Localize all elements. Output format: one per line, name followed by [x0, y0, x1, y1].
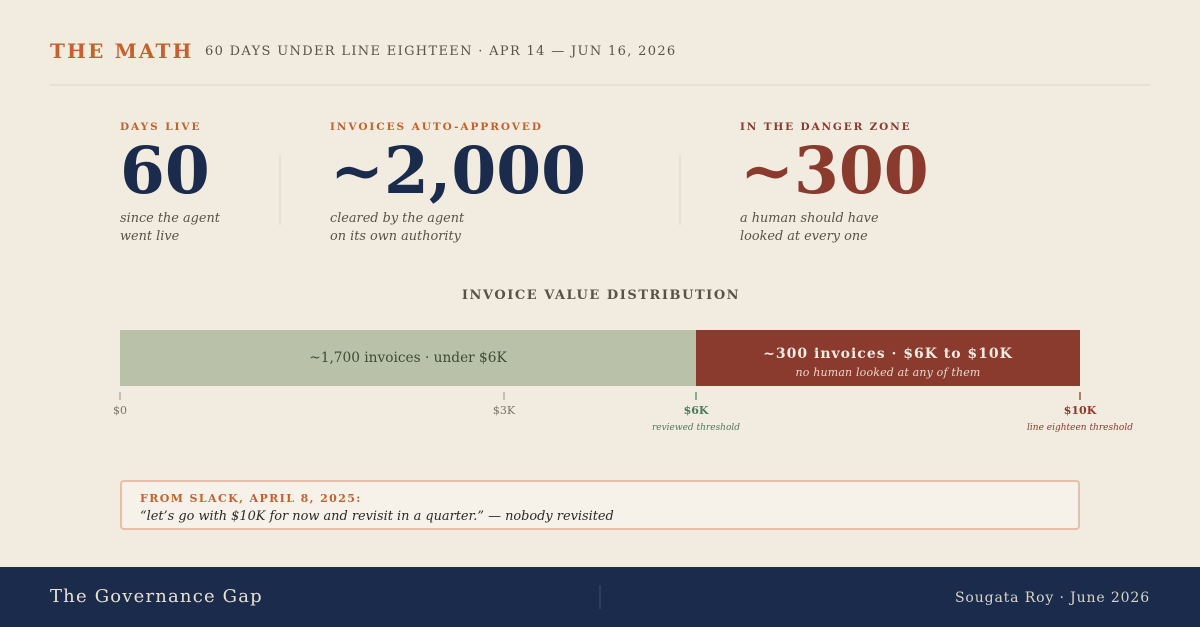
- number: ~300: [740, 132, 929, 208]
- axis tick: $6K reviewed threshold: [652, 392, 740, 433]
- header: [50, 39, 677, 63]
- stat: invoices auto-approved: [330, 121, 586, 244]
- caption: [120, 211, 220, 244]
- axis tick: $0: $0: [113, 404, 127, 417]
- caption: went live: [120, 229, 179, 244]
- label: IN THE DANGER ZONE: [740, 121, 911, 133]
- callout: slack quote: [120, 480, 1080, 530]
- axis tick: $10K line eighteen threshold: $10K: [1064, 404, 1096, 417]
- axis tick: $6K reviewed threshold: $6K: [684, 404, 708, 417]
- caption: cleared by the agent: [330, 211, 464, 226]
- segment: under $6K: [120, 330, 696, 386]
- footer title: The Governance Gap: [50, 586, 263, 607]
- stat: danger zone: [740, 121, 929, 244]
- caption: [740, 211, 879, 244]
- label: INVOICES AUTO-APPROVED: [330, 121, 543, 133]
- axis tick: $10K line eighteen threshold: [1027, 392, 1133, 433]
- callout label: FROM SLACK, APRIL 8, 2025:: [140, 492, 362, 504]
- caption: a human should have: [740, 211, 879, 226]
- segment: $6K to $10K: no human looked at any of them: [796, 366, 980, 379]
- footer: [0, 567, 1200, 627]
- number: ~2,000: [330, 132, 586, 208]
- caption: looked at every one: [740, 229, 868, 244]
- number: 60: [120, 132, 210, 208]
- subtitle: 60 DAYS UNDER LINE EIGHTEEN · APR 14 — JUN 16, 2026: [205, 44, 677, 59]
- title: THE MATH: [50, 39, 194, 63]
- stat: days live: [120, 121, 220, 244]
- footer byline: Sougata Roy · June 2026: [955, 590, 1150, 606]
- segment: $6K to $10K: ~300 invoices · $6K to $10K: [763, 346, 1013, 362]
- caption: [330, 211, 464, 244]
- caption: on its own authority: [330, 229, 461, 244]
- axis tick: $3K: $3K: [493, 404, 515, 417]
- stacked bar chart: [120, 330, 1080, 386]
- quote: “let’s go with $10K for now and revisit in a quarter.” — nobody revisited: [140, 509, 614, 524]
- segment: under $6K: ~1,700 invoices · under $6K: [309, 350, 507, 366]
- segment: $6K to $10K: [696, 330, 1080, 386]
- label: DAYS LIVE: [120, 121, 201, 133]
- axis tick: $10K line eighteen threshold: line eighteen threshold: [1027, 423, 1133, 433]
- caption: since the agent: [120, 211, 220, 226]
- chart heading: INVOICE VALUE DISTRIBUTION: [462, 288, 740, 303]
- axis tick: $6K reviewed threshold: reviewed threshold: [652, 423, 740, 433]
